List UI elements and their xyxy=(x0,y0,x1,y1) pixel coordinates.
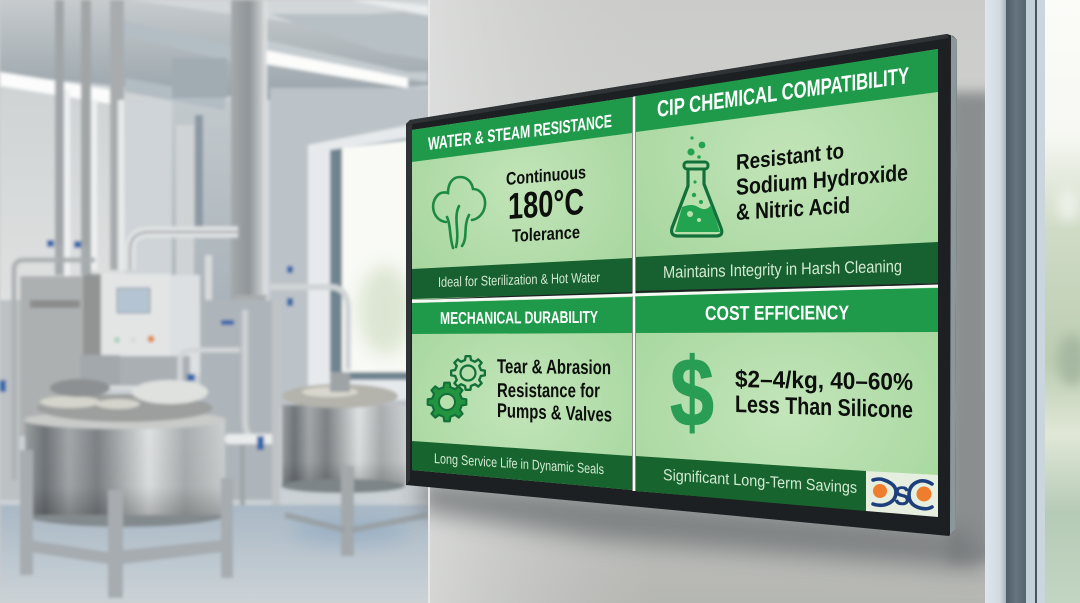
window on back wall xyxy=(308,124,430,400)
body text: Tolerance xyxy=(512,222,580,246)
ceiling ducts xyxy=(120,20,232,62)
body text xyxy=(736,138,908,225)
panel: mechanical durability xyxy=(412,296,632,490)
panel: water and steam resistance xyxy=(412,97,632,300)
right window frame and outdoor view xyxy=(985,0,1080,603)
icon: steam cloud xyxy=(433,177,485,248)
heading: COST EFFICIENCY xyxy=(705,302,850,325)
body text xyxy=(497,356,612,427)
footer text: Long Service Life in Dynamic Seals xyxy=(434,450,604,477)
control panel screen xyxy=(117,288,150,313)
footer band xyxy=(412,441,632,490)
piping frames xyxy=(14,260,95,480)
header band xyxy=(636,288,938,333)
machine cabinets xyxy=(0,300,20,500)
rear tank xyxy=(282,405,406,485)
divider lines between panels xyxy=(412,96,938,491)
header band xyxy=(636,49,938,132)
front tank legs and frame xyxy=(20,450,233,598)
background: blurred stainless steel process lab xyxy=(0,0,432,603)
pipe bend xyxy=(130,232,238,270)
icon: gears xyxy=(428,356,485,421)
large vertical pipe xyxy=(231,0,267,300)
blue valve handles xyxy=(0,240,293,450)
body text: Tear & Abrasion xyxy=(497,356,611,379)
body text: Continuous xyxy=(506,162,586,189)
header band xyxy=(412,97,632,162)
heading: WATER & STEAM RESISTANCE xyxy=(428,111,612,154)
footer band xyxy=(412,258,632,299)
rear tank legs xyxy=(341,466,354,556)
light strip: left xyxy=(0,72,112,104)
footer text: Significant Long-Term Savings xyxy=(663,467,857,497)
header band xyxy=(412,297,632,334)
icon: flask xyxy=(672,136,722,236)
ceiling xyxy=(0,0,432,100)
shadow right of display xyxy=(948,92,994,562)
body text: $2–4/kg, 40–60% xyxy=(735,366,913,396)
body text: Resistant to xyxy=(736,138,844,175)
heading: CIP CHEMICAL COMPATIBILITY xyxy=(657,62,909,122)
footer band xyxy=(636,456,866,511)
body text xyxy=(735,366,913,424)
heading: MECHANICAL DURABILITY xyxy=(440,308,598,328)
logo: DSC: S xyxy=(894,481,910,511)
display bezel xyxy=(406,34,957,536)
floor xyxy=(0,505,432,603)
footer text: Maintains Integrity in Harsh Cleaning xyxy=(663,257,902,282)
shadow under display xyxy=(420,480,985,570)
footer band xyxy=(636,242,938,291)
icon: dollar sign: $ xyxy=(670,338,714,447)
logo: DSC xyxy=(866,471,938,517)
body text: 180°C xyxy=(508,180,584,227)
body text: Resistance for xyxy=(497,380,600,402)
light strip: right xyxy=(265,50,408,88)
front tank xyxy=(25,503,225,527)
panel: CIP chemical compatibility xyxy=(636,49,938,291)
back wall xyxy=(0,88,180,388)
panel: cost efficiency xyxy=(636,286,938,517)
body text: Sodium Hydroxide xyxy=(736,159,908,200)
body text: & Nitric Acid xyxy=(736,192,850,225)
vertical thin pipes xyxy=(55,0,64,275)
body text xyxy=(506,162,586,246)
footer text: Ideal for Sterilization & Hot Water xyxy=(438,269,600,290)
body text: Less Than Silicone xyxy=(735,391,913,424)
body text: Pumps & Valves xyxy=(497,400,612,427)
wall panel xyxy=(420,0,994,603)
